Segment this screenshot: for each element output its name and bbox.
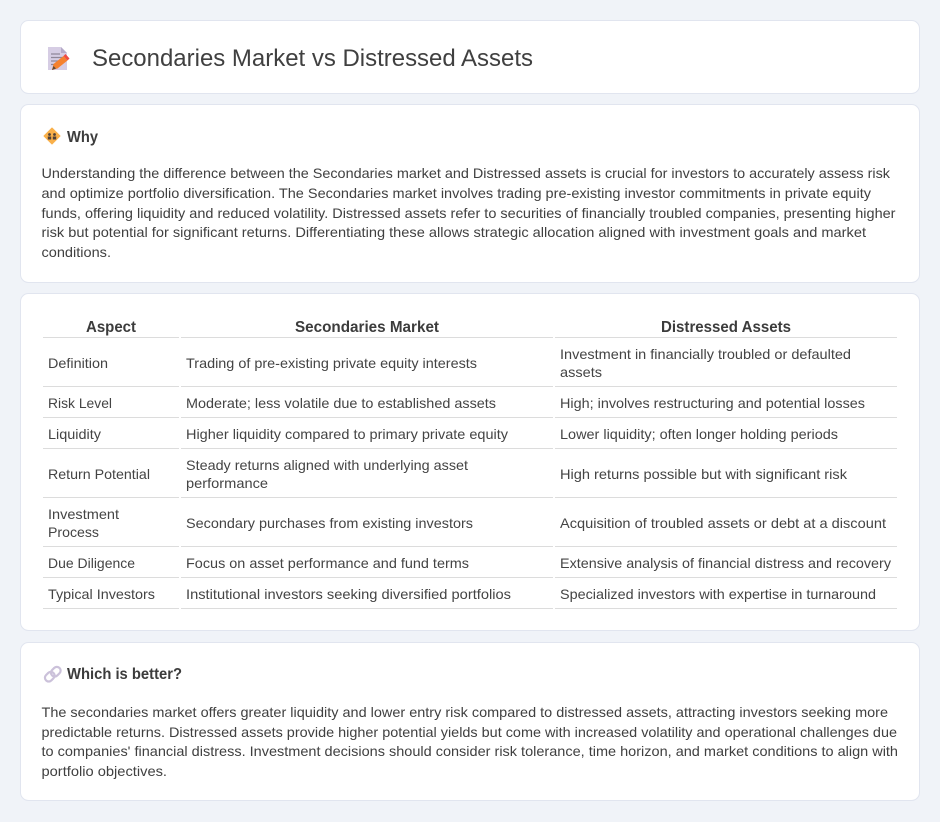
row: liquidity: Liquidity (48, 426, 101, 442)
text block: verdict: predictable returns. Distressed assets provide higher potential yields but come with increased volatility and operational challenges due (42, 724, 897, 740)
row: investment process: Secondary purchases from existing investors (186, 515, 473, 531)
icon: document with pencil (48, 47, 70, 70)
row: return potential: performance (186, 475, 268, 491)
text block: why explanation: conditions. (42, 244, 111, 260)
panel: title header (20, 20, 920, 94)
heading: why: Why (67, 129, 98, 146)
row: typical investors (48, 586, 876, 602)
row: risk level (48, 395, 865, 411)
row: definition: assets (560, 364, 602, 380)
row: investment process: Process (48, 524, 99, 540)
row: risk level: High; involves restructuring and potential losses (560, 395, 865, 411)
heading: which is better: Which is better? (67, 666, 182, 683)
row: due diligence: Focus on asset performance and fund terms (186, 555, 469, 571)
row: liquidity (48, 426, 838, 442)
row: typical investors: Typical Investors (48, 586, 155, 602)
text block: why explanation: Understanding the difference between the Secondaries market and Distressed assets is crucial for investors to accurately assess risk (42, 165, 891, 181)
row: investment process (48, 506, 886, 540)
title: Secondaries Market vs Distressed Assets (92, 45, 533, 72)
panel: why (20, 104, 920, 282)
row: definition: Trading of pre-existing private equity interests (186, 355, 477, 371)
row: liquidity: Lower liquidity; often longer holding periods (560, 426, 838, 442)
table header row: Secondaries Market (295, 319, 440, 336)
row: typical investors: Specialized investors with expertise in turnaround (560, 586, 876, 602)
panel: comparison table (20, 294, 920, 630)
row: typical investors: Institutional investors seeking diversified portfolios (186, 586, 511, 602)
table header row: Distressed Assets (661, 319, 791, 336)
row: due diligence: Due Diligence (48, 555, 135, 571)
row: definition: Investment in financially troubled or defaulted (560, 346, 851, 362)
text block: why explanation: risk but potential for significant returns. Differentiating these allows strategic allocation aligned with investment goals and market (42, 224, 866, 240)
table rule lines (43, 337, 897, 609)
text block: why explanation (42, 165, 896, 260)
row: risk level: Risk Level (48, 395, 112, 411)
row: return potential: Return Potential (48, 466, 150, 482)
text block: verdict: to companies' financial distress. Investment decisions should consider risk tolerance, time horizon, and market conditions to align with (42, 743, 898, 759)
row: return potential (48, 457, 848, 491)
row: due diligence (48, 555, 891, 571)
text block: why explanation: and optimize portfolio diversification. The Secondaries market involves trading pre-existing investor commitments in private equity (42, 185, 871, 201)
row: liquidity: Higher liquidity compared to primary private equity (186, 426, 508, 442)
table header row: Aspect (86, 319, 137, 336)
row: return potential: Steady returns aligned with underlying asset (186, 457, 468, 473)
row: risk level: Moderate; less volatile due to established assets (186, 395, 496, 411)
text block: why explanation: funds, offering liquidity and reduced volatility. Distressed assets refer to securities of financially troubled companies, presenting higher (42, 205, 896, 221)
row: investment process: Acquisition of troubled assets or debt at a discount (560, 515, 886, 531)
row: investment process: Investment (48, 506, 119, 522)
panel: which is better (20, 642, 920, 800)
icon: chain link (43, 665, 62, 683)
icon: orange diamond (44, 128, 60, 144)
text block: verdict: portfolio objectives. (42, 763, 167, 779)
row: return potential: High returns possible but with significant risk (560, 466, 848, 482)
row: definition (48, 346, 851, 380)
table header row (86, 319, 791, 336)
row: due diligence: Extensive analysis of financial distress and recovery (560, 555, 891, 571)
text block: verdict (42, 704, 898, 779)
row: definition: Definition (48, 355, 108, 371)
text block: verdict: The secondaries market offers greater liquidity and lower entry risk compared to distressed assets, attracting investors seeking more (42, 704, 888, 720)
